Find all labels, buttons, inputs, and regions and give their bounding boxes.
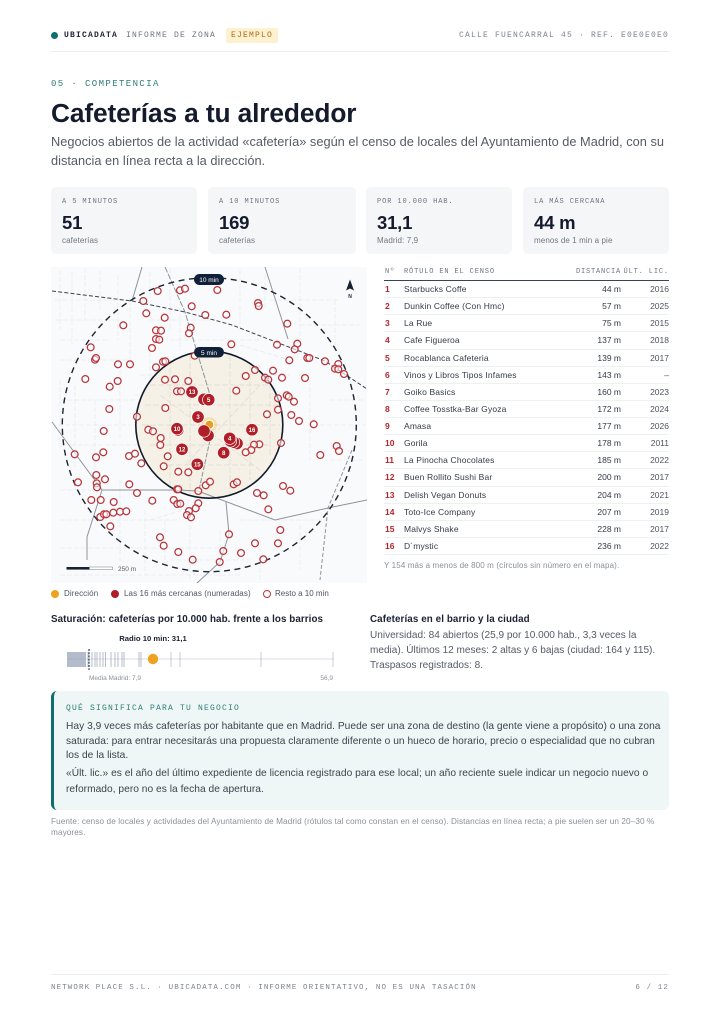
row 2: 57 m: [602, 301, 621, 311]
numbered nearest cafés: [171, 386, 258, 470]
row 8: 2024: [650, 404, 669, 414]
neighbourhood ticks: [67, 652, 333, 667]
table header: ÚLT. LIC.: [624, 268, 669, 276]
row 2: [384, 298, 669, 315]
legend: numbered label: Las 16 más cercanas (numeradas): [124, 589, 251, 598]
row 13: 13: [385, 490, 394, 500]
row 2: 2025: [650, 301, 669, 311]
neighbourhood and city text: Universidad: 84 abiertos (25,9 por 10.000 hab., 3,3 veces la: [370, 630, 636, 641]
average label: Media Madrid: 7,9: [89, 675, 141, 682]
saturation heading: Saturación: cafeterías por 10.000 hab. frente a los barrios: [51, 614, 323, 625]
callout paragraph 1: Hay 3,9 veces más cafeterías por habitante que en Madrid. Puede ser una zona de destino (la gente viene a propósito) o una zona: [66, 721, 660, 732]
row 13: [384, 487, 669, 504]
header bar: [51, 28, 669, 52]
row 10: 2011: [651, 438, 669, 448]
intro text: [51, 134, 664, 168]
row 6: 143 m: [597, 370, 621, 380]
callout paragraph 2: «Últ. lic.» es el año del último expediente de licencia registrado para ese local; un año reciente suele indicar un negocio nuevo o: [66, 768, 648, 779]
table header: RÓTULO EN EL CENSO: [404, 268, 495, 276]
row 6: 6: [385, 370, 390, 380]
source note: mayores.: [51, 828, 85, 836]
row 8: Coffee Tosstka-Bar Gyoza: [404, 404, 506, 414]
row 10: 178 m: [597, 438, 621, 448]
row 16: [384, 538, 669, 555]
row 12: 2017: [650, 472, 669, 482]
5-minute walking area: [136, 351, 283, 498]
row 7: 160 m: [597, 387, 621, 397]
row 1: Starbucks Coffe: [404, 284, 467, 294]
row 11: 11: [385, 455, 394, 465]
5 min label: 5 min: [201, 350, 217, 357]
row 6: –: [664, 370, 669, 380]
stat card: 10 minutes: [208, 187, 356, 254]
map: [52, 267, 367, 583]
Madrid average: [88, 649, 90, 670]
callout paragraph 1: [66, 721, 660, 761]
row 13: Delish Vegan Donuts: [404, 490, 486, 500]
row 15: 15: [385, 524, 394, 534]
footer text: NETWORK PLACE S.L. · UBICADATA.COM · INFORME ORIENTATIVO, NO ES UNA TASACIÓN: [51, 984, 477, 992]
neighbourhood and city heading: Cafeterías en el barrio y la ciudad: [370, 614, 530, 625]
sample badge: [226, 28, 278, 43]
neighbourhood and city text: Traspasos registrados: 8.: [370, 660, 483, 671]
numbered nearest cafés: 12: [179, 448, 186, 454]
row 10: Gorila: [404, 438, 428, 448]
north arrow: N: [348, 294, 352, 300]
stat card: 10 minutes: A 10 MINUTOS: [219, 198, 280, 206]
table note: Y 154 más a menos de 800 m (círculos sin número en el mapa).: [384, 561, 619, 570]
row 7: 2023: [650, 387, 669, 397]
stat card: 5 minutes: A 5 MINUTOS: [62, 198, 118, 206]
row 12: 200 m: [597, 472, 621, 482]
stat card: per 10000 inhabitants: POR 10.000 HAB.: [377, 198, 454, 206]
scale bar: 250 m: [118, 566, 136, 573]
neighbourhood and city text: media). Últimos 12 meses: 2 altas y 6 bajas (ciudad: 164 y 115).: [370, 645, 655, 656]
row 1: 1: [385, 284, 390, 294]
stat card: 10 minutes: 169: [219, 212, 249, 233]
row 16: D´mystic: [404, 541, 438, 551]
callout paragraph 1: saturada: para entrar necesitarás una propuesta claramente diferente o un hueco de horario, precio o especialidad que no cubran: [66, 736, 655, 747]
row 6: [384, 367, 669, 384]
scale bar: [66, 566, 136, 573]
row 14: 14: [385, 507, 394, 517]
row 7: 7: [385, 387, 390, 397]
callout paragraph 2: reformado, pero no es la fecha de apertura.: [66, 784, 264, 794]
row 3: 2015: [650, 318, 669, 328]
row 4: 137 m: [597, 335, 621, 345]
row 10: 10: [385, 438, 394, 448]
row 4: [384, 332, 669, 350]
stat card: per 10000 inhabitants: Madrid: 7,9: [377, 236, 418, 245]
main roads: [52, 267, 367, 583]
stat card: nearest: menos de 1 min a pie: [534, 236, 612, 245]
5-minute radius: [136, 351, 283, 498]
10 min label: 10 min: [199, 277, 219, 284]
row 3: 3: [385, 318, 390, 328]
saturation strip chart: Radio 10 min: 31,1: [119, 634, 187, 643]
legend: other cafés: [262, 590, 270, 598]
row 14: 2019: [650, 507, 669, 517]
legend: address label: Dirección: [64, 589, 98, 598]
stat card: per 10000 inhabitants: [366, 187, 512, 254]
10-minute radius: [62, 278, 356, 572]
row 15: [384, 521, 669, 538]
callout: [51, 691, 669, 810]
row 5: 5: [385, 352, 390, 362]
row 6: Vinos y Libros Tipos Infames: [404, 370, 517, 380]
stat card: 10 minutes: cafeterías: [219, 236, 255, 245]
row 10: [384, 435, 669, 452]
row 5: 139 m: [597, 352, 621, 362]
row 2: Dunkin Coffee (Con Hmc): [404, 301, 505, 311]
row 3: [384, 315, 669, 332]
legend: numbered cafés: [111, 590, 119, 598]
row 15: 2017: [650, 524, 669, 534]
row 12: Buen Rollito Sushi Bar: [404, 472, 492, 482]
neighbourhood and city text: [370, 630, 655, 671]
intro text: distancia en línea recta a la dirección.: [51, 153, 265, 168]
numbered nearest cafés: 3: [196, 415, 200, 421]
title: Cafeterías a tu alrededor: [51, 98, 356, 128]
intro text: Negocios abiertos de la actividad «cafetería» según el censo de locales del Ayuntamiento de Madrid, con su: [51, 134, 664, 149]
row 11: 2022: [650, 455, 669, 465]
callout paragraph 2: [66, 767, 648, 794]
rest of cafés within 10 minutes: [71, 285, 347, 565]
row 13: 204 m: [597, 490, 621, 500]
10 min label: [194, 274, 224, 285]
row 5: Rocablanca Cafeteria: [404, 352, 489, 362]
row 14: Toto-Ice Company: [404, 507, 475, 517]
legend: address: [51, 590, 59, 598]
page number: 6 / 12: [635, 984, 669, 992]
stat card: 5 minutes: 51: [62, 212, 82, 233]
row 2: 2: [385, 301, 390, 311]
brand name: UBICADATA: [64, 31, 118, 40]
row 16: 16: [385, 541, 394, 551]
stat card: nearest: [523, 187, 669, 254]
section label: 05 · COMPETENCIA: [51, 79, 160, 89]
row 15: Malvys Shake: [404, 524, 459, 534]
row 16: 2022: [650, 541, 669, 551]
row 4: 2018: [650, 335, 669, 345]
row 14: 207 m: [597, 507, 621, 517]
brand dot: [51, 32, 58, 38]
row 11: 185 m: [597, 455, 621, 465]
row 7: [384, 384, 669, 401]
row 12: 12: [385, 472, 394, 482]
competitor table: [384, 266, 669, 555]
table header: Nº: [385, 268, 395, 276]
stat card: nearest: LA MÁS CERCANA: [534, 198, 605, 206]
numbered nearest cafés: 8: [222, 451, 226, 457]
numbered nearest cafés: 4: [228, 436, 232, 442]
row 8: [384, 401, 669, 418]
row 9: [384, 418, 669, 435]
map legend: [51, 589, 329, 598]
row 9: Amasa: [404, 421, 431, 431]
row 11: [384, 452, 669, 469]
row 9: 2026: [650, 421, 669, 431]
row 8: 8: [385, 404, 390, 414]
address halo and marker: [202, 417, 217, 432]
row 14: [384, 504, 669, 521]
table header: DISTANCIA: [576, 268, 621, 276]
source note: Fuente: censo de locales y actividades del Ayuntamiento de Madrid (rótulos tal como constan en el censo). Distancias en línea recta; a pie suelen ser un 20–30 %: [51, 817, 654, 826]
row 4: 4: [385, 335, 390, 345]
numbered nearest cafés: 15: [194, 462, 201, 468]
stat card: nearest: 44 m: [534, 212, 575, 233]
row 3: 75 m: [602, 318, 621, 328]
row 4: Cafe Figueroa: [404, 335, 460, 345]
address reference: CALLE FUENCARRAL 45 · REF. E0E0E0E0: [459, 31, 669, 40]
row 12: [384, 469, 669, 487]
stat card: per 10000 inhabitants: 31,1: [377, 212, 412, 233]
row 7: Goiko Basics: [404, 387, 455, 397]
source note: [51, 817, 654, 836]
row 9: 9: [385, 421, 390, 431]
max label: 56,9: [320, 675, 333, 682]
saturation strip chart: [67, 634, 334, 682]
numbered nearest cafés: 5: [207, 398, 211, 404]
legend: other label: Resto a 10 min: [275, 589, 329, 598]
north arrow: [346, 280, 354, 300]
footer: [51, 974, 669, 995]
row 8: 172 m: [597, 404, 621, 414]
row 15: 228 m: [597, 524, 621, 534]
callout paragraph 1: los de la lista.: [66, 750, 128, 761]
row 11: La Pinocha Chocolates: [404, 455, 495, 465]
row 13: 2021: [650, 490, 669, 500]
row 5: [384, 350, 669, 367]
row 16: 236 m: [597, 541, 621, 551]
sample badge: EJEMPLO: [231, 31, 273, 40]
row 1: [384, 281, 669, 298]
numbered nearest cafés: 16: [249, 428, 256, 434]
row 3: La Rue: [404, 318, 432, 328]
table header: [384, 265, 669, 281]
5 min label: [194, 347, 224, 358]
row 1: 2016: [650, 284, 669, 294]
row 9: 177 m: [597, 421, 621, 431]
radius marker: [148, 654, 158, 664]
callout heading: QUÉ SIGNIFICA PARA TU NEGOCIO: [66, 704, 240, 713]
numbered nearest cafés: 10: [174, 427, 181, 433]
stat card: 5 minutes: [51, 187, 197, 254]
row 5: 2017: [650, 352, 669, 362]
numbered nearest cafés: 13: [189, 390, 196, 396]
row 1: 44 m: [602, 284, 621, 294]
stat card: 5 minutes: cafeterías: [62, 236, 98, 245]
report type: INFORME DE ZONA: [126, 31, 216, 40]
